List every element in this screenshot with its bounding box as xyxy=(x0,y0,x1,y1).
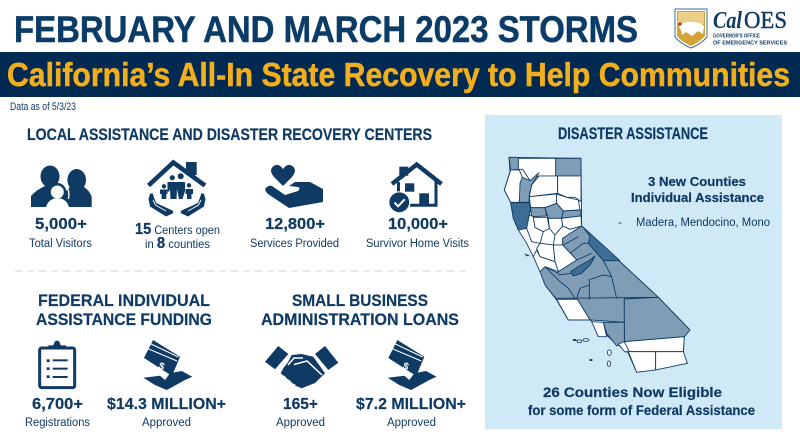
callout: new counties xyxy=(618,174,770,229)
stat: services provided: Services Provided xyxy=(250,238,339,250)
icon: money in hand: $ xyxy=(157,361,166,373)
panel heading: DISASTER ASSISTANCE xyxy=(558,125,708,143)
stat: SBA loans approved: 165+ xyxy=(283,396,318,413)
logo: Cal OES xyxy=(675,8,787,48)
heading: federal individual assistance funding: ASSISTANCE FUNDING xyxy=(36,310,212,329)
stat: survivor home visits: 10,000+ xyxy=(388,216,448,233)
stat: services provided xyxy=(250,165,339,250)
heading: local assistance: LOCAL ASSISTANCE AND DISASTER RECOVERY CENTERS xyxy=(27,125,432,144)
callout: new counties: Individual Assistance xyxy=(631,190,764,205)
callout: new counties: - xyxy=(618,217,622,229)
stat: survivor home visits: Survivor Home Visits xyxy=(366,238,469,250)
stat: centers open: 15 Centers open xyxy=(135,221,220,238)
stat: SBA loans approved xyxy=(265,346,338,429)
heading: small business administration loans: ADMINISTRATION LOANS xyxy=(261,310,459,329)
icon: handshake xyxy=(265,346,338,388)
title: FEBRUARY AND MARCH 2023 STORMS xyxy=(14,9,638,50)
panel: disaster assistance xyxy=(485,115,782,429)
stat: total visitors xyxy=(29,166,92,250)
stat: federal funding approved: $14.3 MILLION+ xyxy=(107,396,226,413)
icon: clipboard xyxy=(40,341,75,388)
callout: eligible counties: 26 Counties Now Eligible xyxy=(543,385,723,400)
stat: federal funding approved xyxy=(107,340,226,429)
stat: SBA dollars approved: $7.2 MILLION+ xyxy=(356,396,466,413)
stat: SBA dollars approved: Approved xyxy=(387,417,436,429)
data date note: Data as of 5/3/23 xyxy=(10,101,76,113)
heading: small business administration loans: SMALL BUSINESS xyxy=(292,291,428,310)
logo: Cal OES: OES xyxy=(744,8,787,34)
stat: services provided: 12,800+ xyxy=(265,216,325,233)
callout: new counties: 3 New Counties xyxy=(648,174,746,189)
logo: Cal OES: Cal xyxy=(713,8,742,34)
logo: Cal OES: OF EMERGENCY SERVICES xyxy=(713,40,787,46)
heading: small business administration loans xyxy=(261,291,459,329)
logo: Cal OES: GOVERNOR'S OFFICE xyxy=(713,34,760,40)
heading: federal individual assistance funding xyxy=(36,291,212,329)
stat: centers open xyxy=(135,162,220,252)
stat: federal funding approved: Approved xyxy=(142,417,191,429)
icon: house with check xyxy=(389,164,442,213)
icon: money in hand: $ xyxy=(401,361,411,373)
stat: centers open: in 8 counties xyxy=(145,235,210,252)
stat: total visitors: Total Visitors xyxy=(29,238,92,250)
stat: SBA dollars approved xyxy=(356,340,466,429)
stat: registrations: Registrations xyxy=(25,417,90,429)
icon: house with family and hands xyxy=(148,162,206,216)
callout: new counties: Madera, Mendocino, Mono xyxy=(636,217,770,229)
map: California counties xyxy=(504,157,690,372)
callout: eligible counties: for some form of Federal Assistance xyxy=(528,403,755,418)
icon: people xyxy=(31,166,92,208)
stat: SBA loans approved: Approved xyxy=(276,417,325,429)
stat: registrations xyxy=(25,341,90,429)
callout: eligible counties xyxy=(528,385,755,418)
icon: heart over hand xyxy=(265,165,323,208)
stat: survivor home visits xyxy=(366,164,469,250)
heading: federal individual assistance funding: FEDERAL INDIVIDUAL xyxy=(38,291,210,310)
stat: total visitors: 5,000+ xyxy=(35,216,87,233)
stat: registrations: 6,700+ xyxy=(32,396,83,413)
